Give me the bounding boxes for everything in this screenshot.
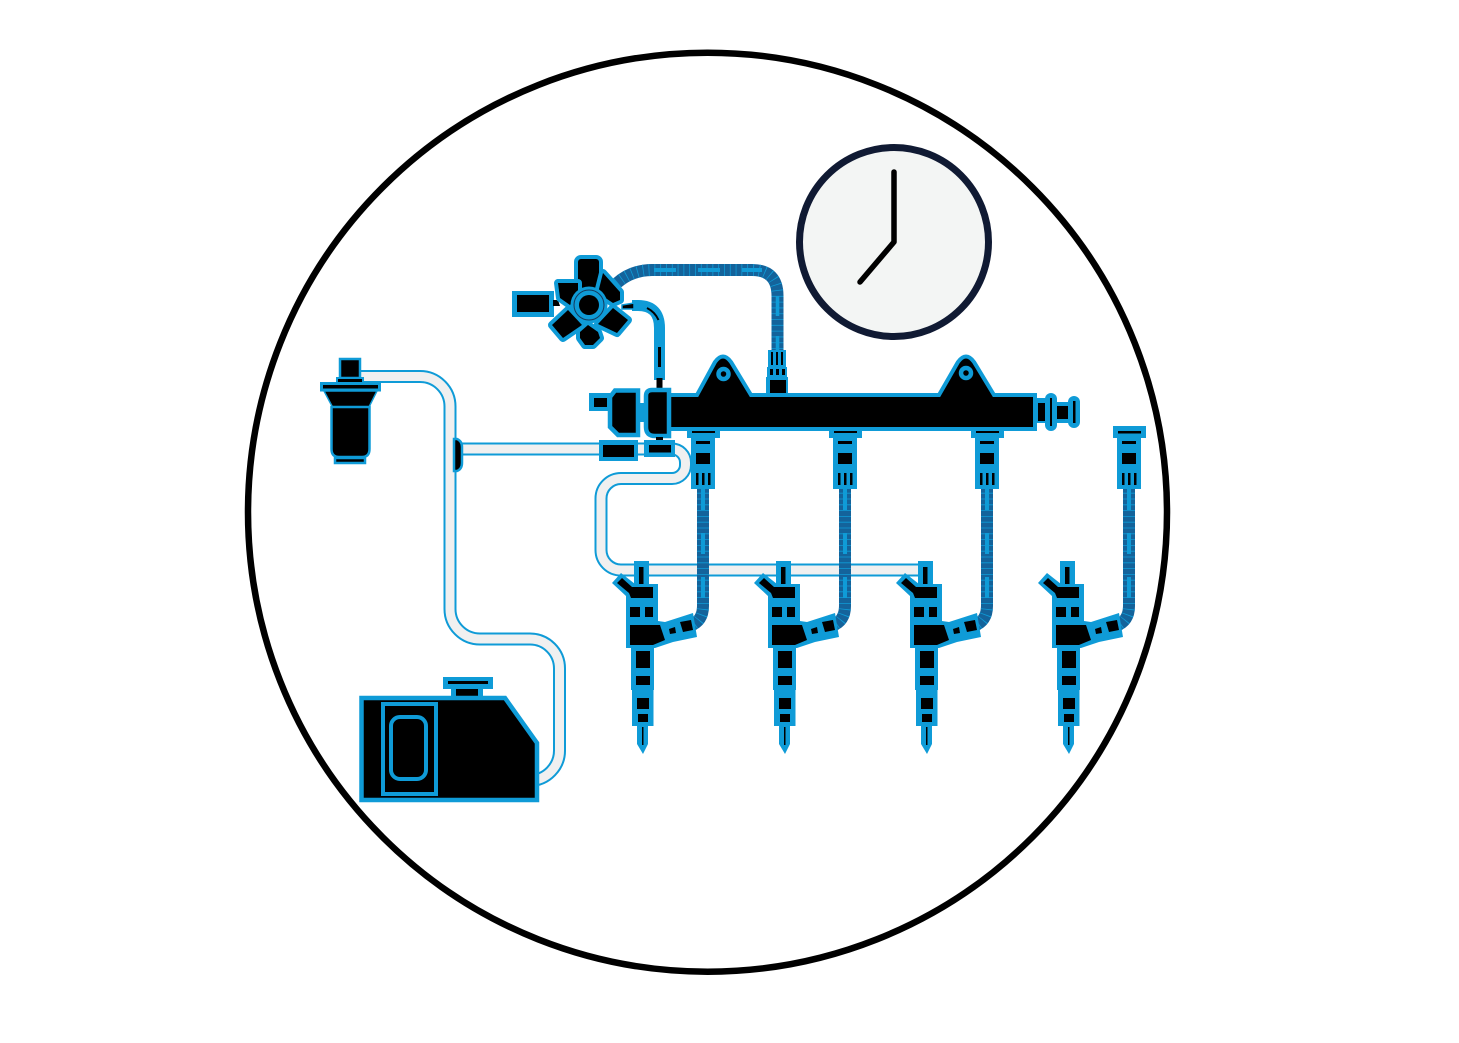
common rail xyxy=(668,356,1080,431)
injectors xyxy=(612,561,1123,754)
pump blades xyxy=(552,259,628,345)
fuel tank xyxy=(362,677,537,800)
pipe: pump to rail xyxy=(617,270,778,352)
tank window xyxy=(383,704,436,794)
metering unit and low-pressure fittings xyxy=(589,390,675,461)
pipe: pump to metering unit xyxy=(632,306,660,390)
fuel line T-junction xyxy=(454,439,462,471)
injector supply connectors and high-pressure pipes xyxy=(687,426,1146,626)
outer circle xyxy=(248,53,1167,972)
low-pressure fuel line: filter to tank xyxy=(355,376,560,780)
pump outlet xyxy=(622,303,634,309)
rail mounting holes xyxy=(718,368,971,379)
high-pressure pump xyxy=(512,259,634,345)
fuel filter xyxy=(322,359,380,463)
pump hub xyxy=(570,286,608,324)
rail end fitting xyxy=(1037,393,1080,431)
low-pressure return line xyxy=(460,449,928,570)
tank cap xyxy=(443,677,493,697)
pump inlet connector xyxy=(512,291,560,317)
rail pressure sensor xyxy=(766,350,788,394)
tank body xyxy=(362,698,537,800)
clock xyxy=(800,148,988,336)
